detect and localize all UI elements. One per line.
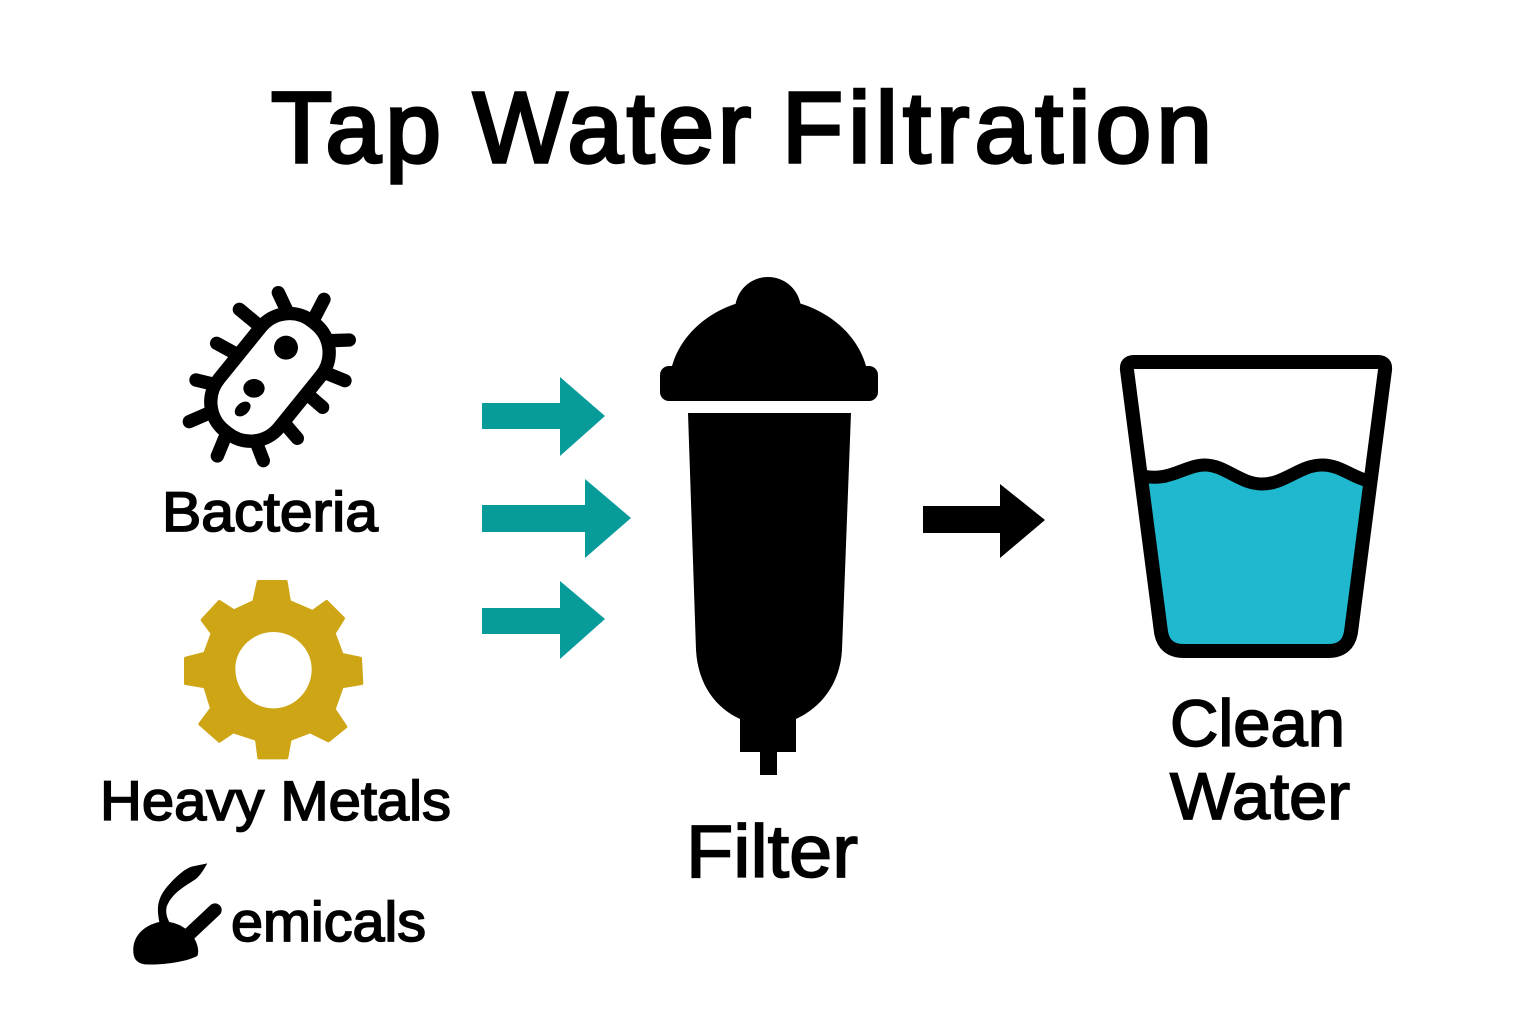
label: clean water: Clean (1170, 686, 1345, 760)
icon: gear for heavy metals (186, 582, 362, 758)
title (271, 72, 1212, 184)
title: Tap (271, 72, 441, 184)
icon: bacteria (189, 293, 349, 461)
icon: chemicals flask fragment (133, 863, 215, 964)
label: clean water (1170, 686, 1350, 833)
arrow: middle teal (482, 479, 631, 558)
label: chemicals: emicals (231, 890, 426, 953)
icon: glass of water (1127, 362, 1385, 651)
icon: filter (660, 277, 878, 775)
label: heavy metals: Heavy Metals (100, 769, 451, 832)
arrow: black output (923, 484, 1045, 558)
label: bacteria: Bacteria (162, 480, 379, 543)
label: clean water: Water (1170, 759, 1350, 833)
arrow: bottom teal (482, 581, 605, 659)
title: Water (473, 72, 751, 184)
label: filter: Filter (686, 810, 858, 893)
title: Filtration (782, 72, 1212, 184)
arrow: top teal (482, 377, 605, 456)
